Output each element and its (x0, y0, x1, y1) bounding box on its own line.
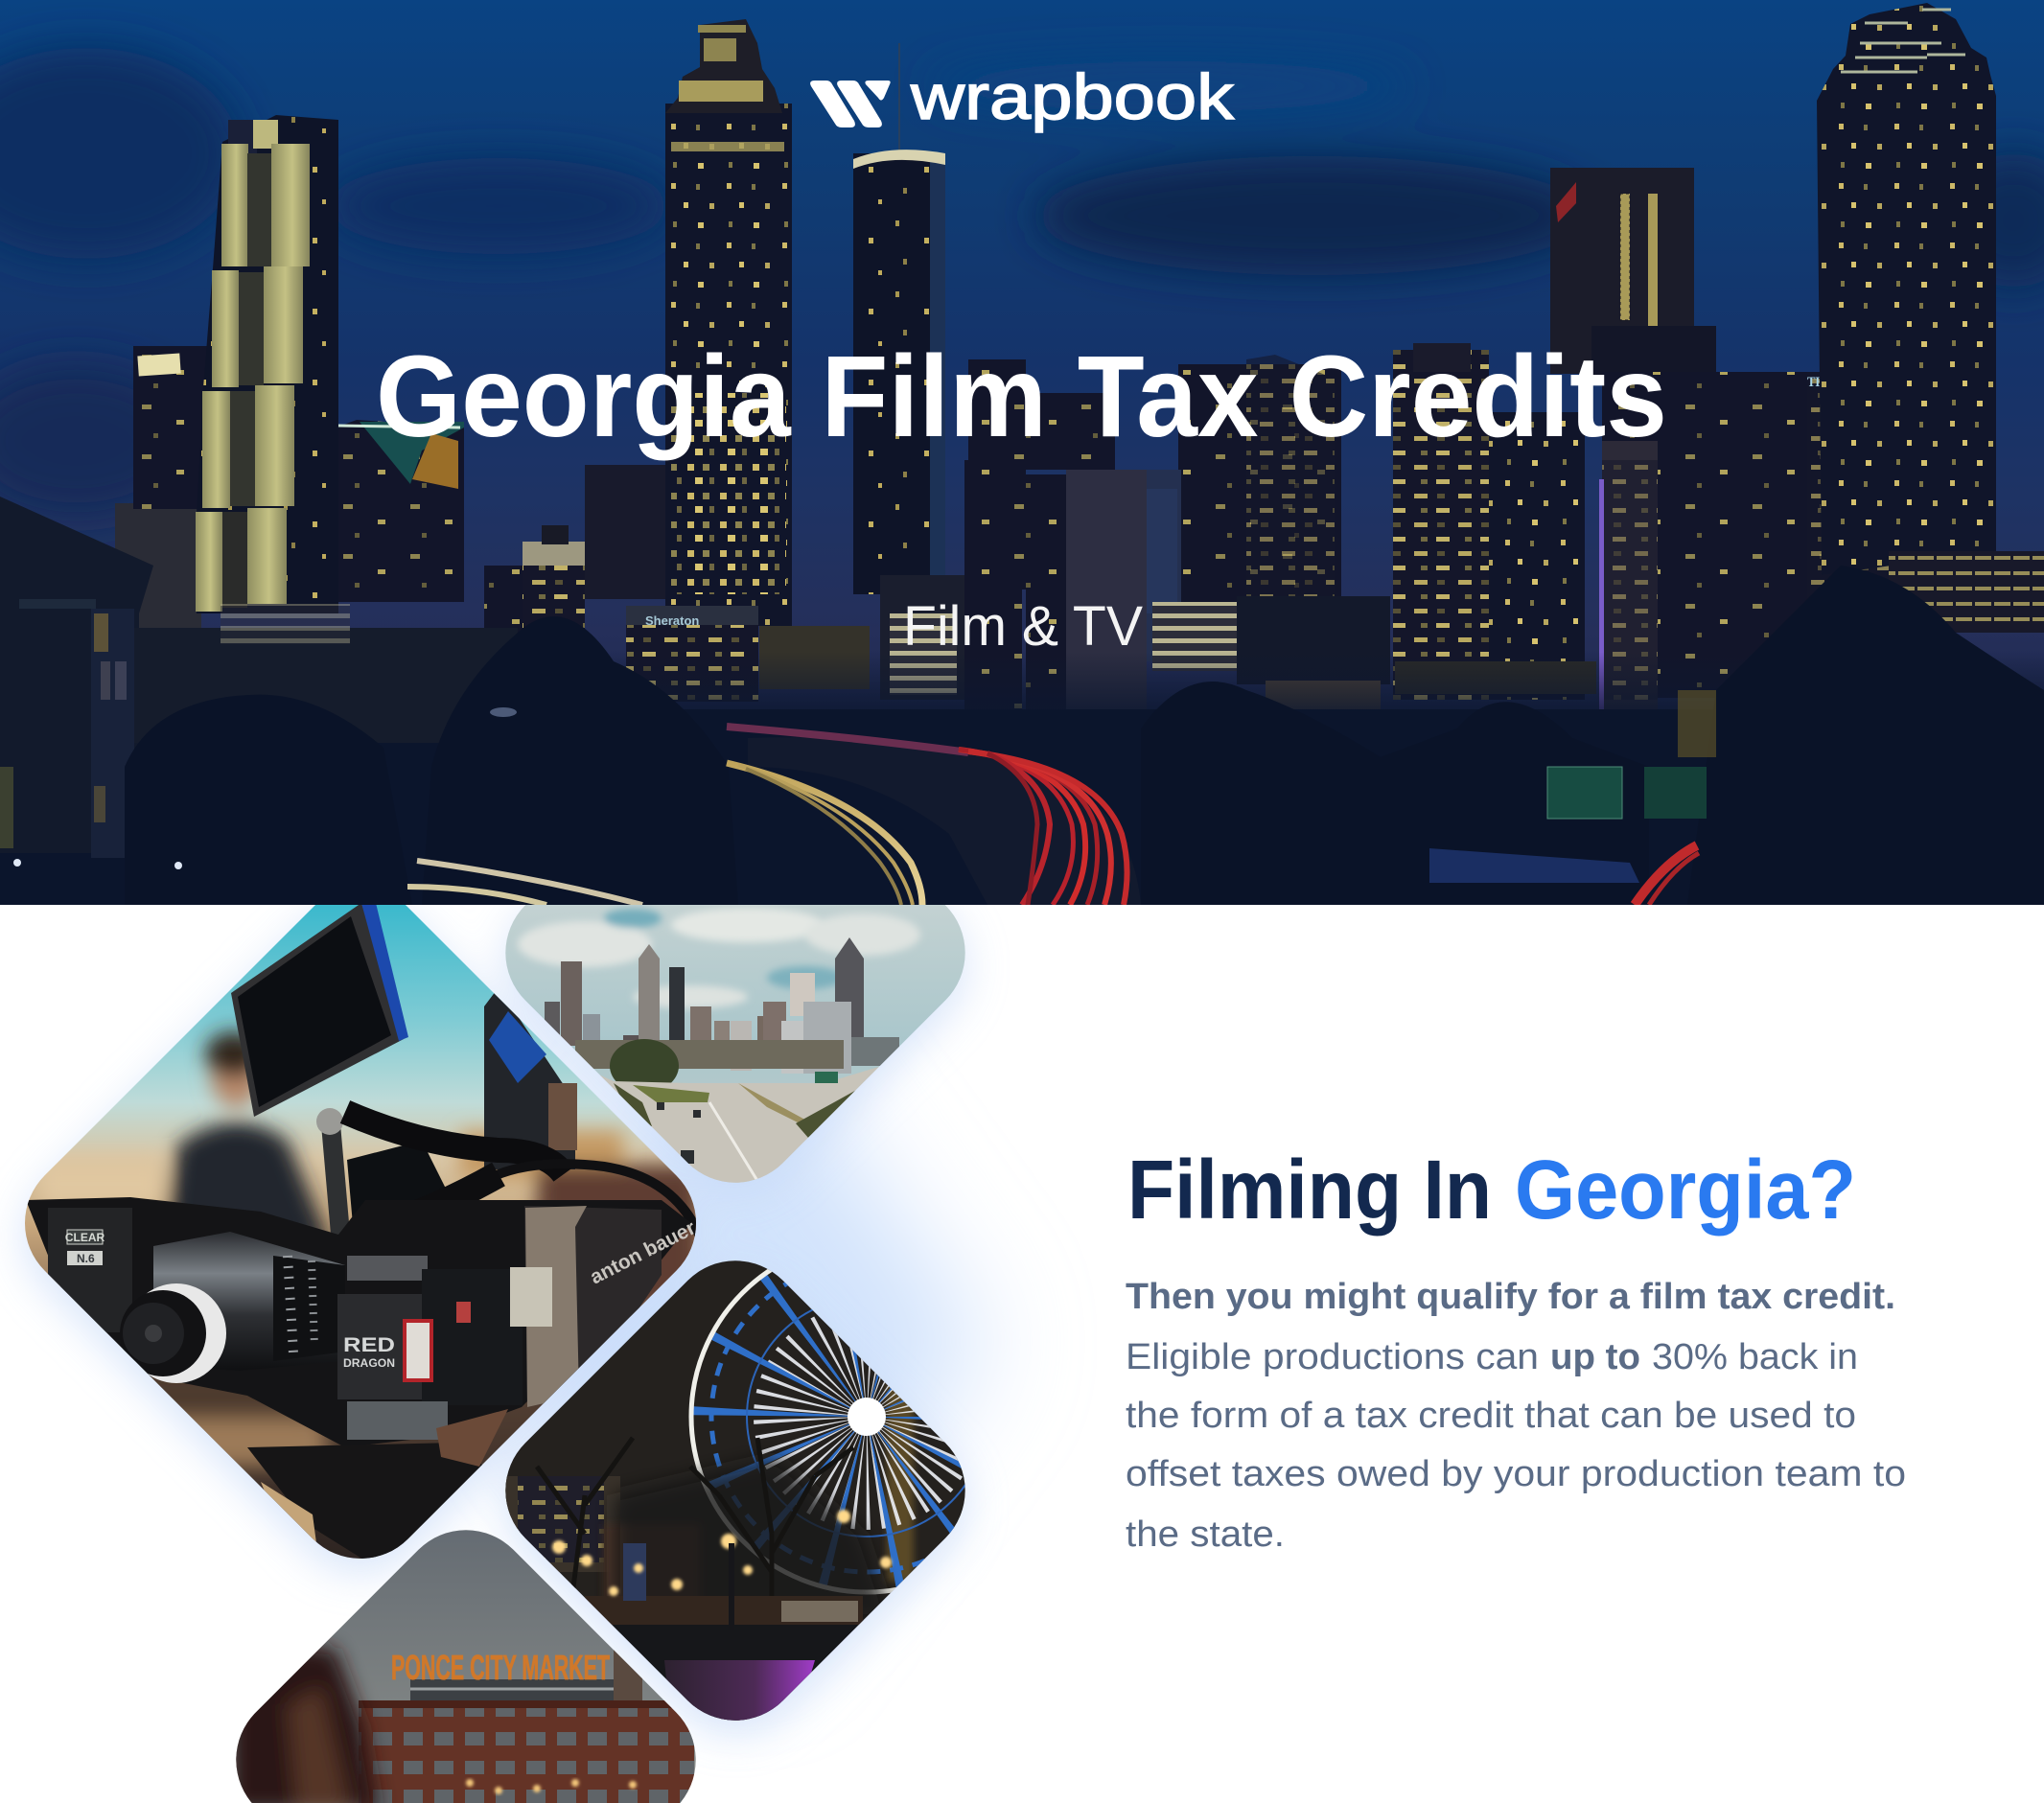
stepped crown tower (1817, 3, 1996, 575)
foreground dark mass (0, 652, 2044, 905)
RED DRAGON label (343, 1338, 395, 1367)
lens barrel (153, 1232, 345, 1352)
heading: Filming In (1127, 1144, 1492, 1237)
RED DRAGON label: DRAGON (343, 1356, 395, 1370)
follow focus wheel (127, 1283, 226, 1383)
middle left backdrop (134, 628, 518, 743)
tower with lit pylons (133, 115, 338, 613)
photo: ferris wheel at night (505, 1260, 965, 1721)
filter labels: N.6 (77, 1252, 95, 1265)
coiled cables (345, 1112, 564, 1174)
hero photo: Atlanta skyline at night (0, 0, 2044, 905)
wordmark: wrapbook (910, 61, 1235, 133)
body text: the form of a tax credit that can be used to (1126, 1396, 1856, 1436)
body text (1126, 1277, 1906, 1555)
support arm (322, 1129, 349, 1235)
photo: cinema camera: anton bauer (587, 1216, 699, 1288)
The Office sign: THE OFFICE (1807, 375, 1882, 390)
matte box (48, 1208, 132, 1332)
sign: PONCE CITY MARKET (391, 1648, 610, 1687)
body text: offset taxes owed by your production team to (1126, 1454, 1906, 1494)
central low buildings: Sheraton (645, 613, 699, 628)
rear accessory (484, 987, 575, 1169)
RED DRAGON label: RED (343, 1334, 395, 1356)
street level (607, 1620, 864, 1721)
central low buildings (626, 460, 1596, 757)
battery (524, 1206, 662, 1407)
midtown right cluster (1393, 168, 1889, 709)
camera body (347, 1256, 428, 1281)
body text: 30% back in (1652, 1337, 1858, 1377)
lower plate (347, 1401, 448, 1440)
blue patch and highway signs (1429, 767, 1707, 883)
brick building (359, 1700, 694, 1803)
soft blue glow (538, 1104, 1007, 1451)
photo: cinema camera (19, 882, 709, 1572)
far buildings (115, 355, 1341, 661)
blurred foreground tree (230, 1639, 379, 1803)
clouds (0, 48, 2044, 518)
body text: Then you might qualify for a film tax credit. (1126, 1277, 1895, 1317)
left dark apartment building (0, 497, 153, 858)
subtitle: Film & TV (903, 595, 1143, 658)
body text: Eligible productions can (1126, 1337, 1539, 1377)
filter labels (65, 1230, 105, 1265)
roads and light trails (407, 727, 1699, 905)
rear dark screen (347, 1145, 445, 1217)
diamond shadows (11, 905, 980, 1748)
street lights and stars (13, 707, 517, 869)
lit gold strip behind trees (1678, 690, 1716, 757)
tree canopy over the wheel base (614, 1457, 892, 1630)
stepped green-gold tower (338, 420, 464, 602)
roof frame (410, 1679, 614, 1702)
logo mark (810, 81, 891, 127)
heading: Georgia? (1515, 1144, 1856, 1237)
photo: Atlanta skyline by day (505, 905, 965, 1183)
camera mass (26, 1197, 691, 1447)
wrapbook logo (810, 61, 1235, 133)
photo: Ponce City Market (230, 1524, 700, 1803)
body text: the state. (1126, 1514, 1285, 1555)
Bank of America Plaza tower (665, 19, 792, 626)
title: Georgia Film Tax Credits (376, 331, 1667, 461)
low lit building far right (1889, 551, 2044, 633)
cylindrical tower and antenna (853, 43, 945, 594)
bare trees (535, 1436, 855, 1596)
monitor (231, 903, 404, 1117)
media label (405, 1321, 431, 1380)
photo collage of four diamonds (11, 905, 1007, 1803)
filter labels: CLEAR (65, 1231, 105, 1244)
body text: up to (1550, 1337, 1640, 1377)
silhouette trees (125, 566, 2044, 905)
wheel (688, 1269, 964, 1595)
